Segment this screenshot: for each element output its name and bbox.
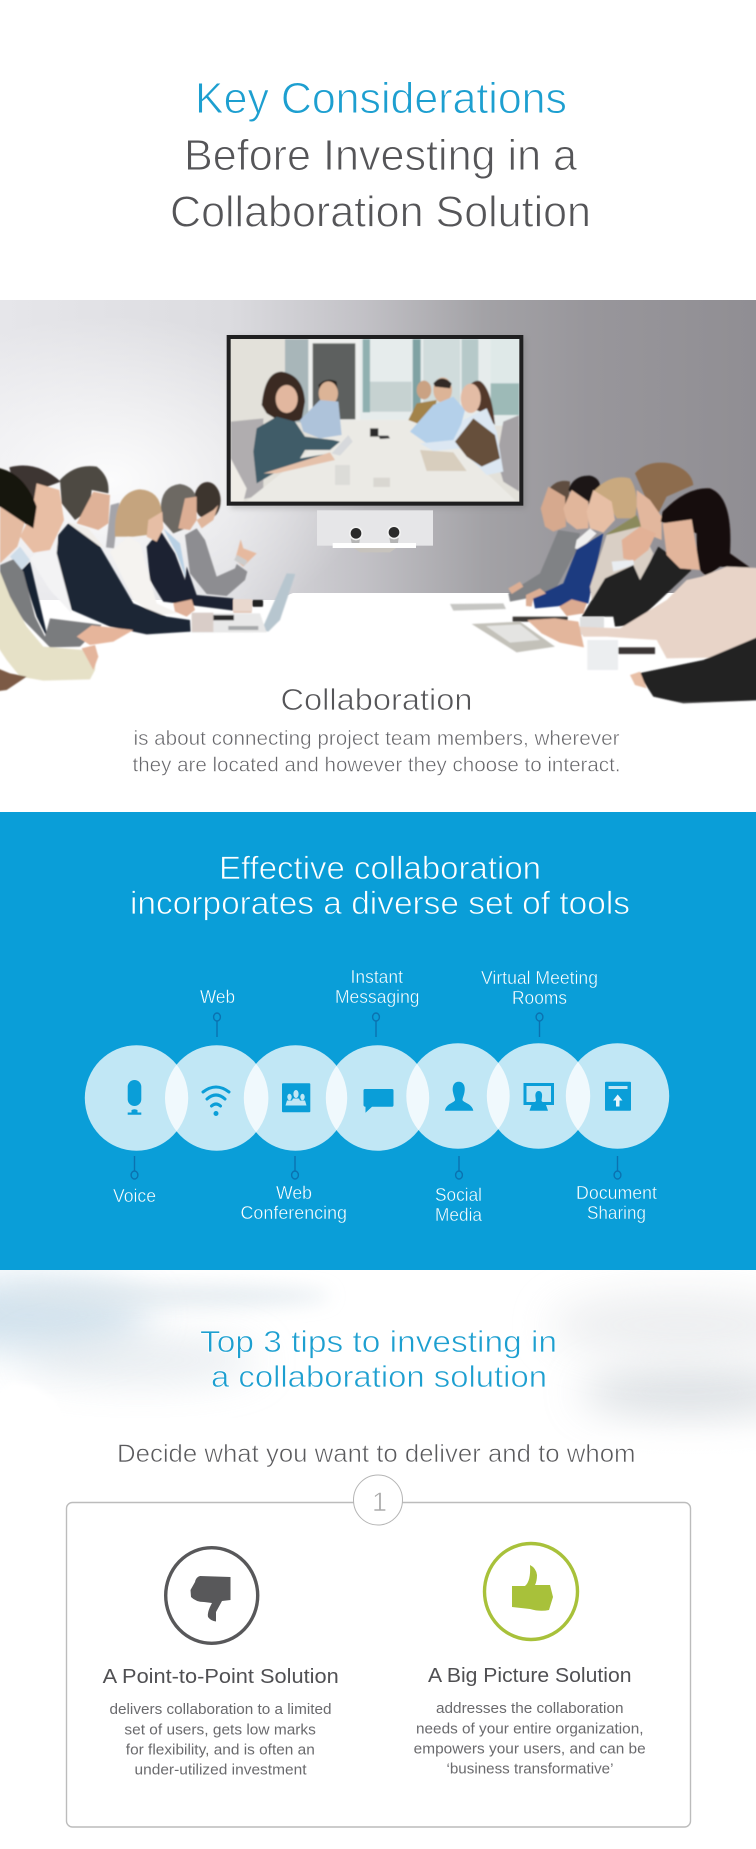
people on the left bbox=[0, 465, 295, 692]
tool labels: Web bbox=[276, 1183, 312, 1203]
tool labels bbox=[113, 967, 657, 1225]
tool labels: Social bbox=[435, 1185, 482, 1205]
glass bbox=[587, 640, 618, 670]
tool labels: Instant bbox=[350, 967, 403, 987]
overlapping circles bbox=[85, 1043, 669, 1151]
tool labels: Media bbox=[435, 1205, 483, 1225]
icon: thumbs up bbox=[484, 1544, 578, 1640]
panel: tip 1 bbox=[66, 1475, 690, 1827]
front woman bbox=[527, 488, 756, 658]
front woman bbox=[0, 467, 98, 692]
tablet and devices bbox=[450, 603, 655, 654]
icon: social media bbox=[445, 1082, 473, 1111]
blond woman bbox=[559, 477, 653, 616]
icon: web conferencing bbox=[282, 1083, 310, 1112]
tool labels: Messaging bbox=[335, 987, 420, 1007]
white chair bbox=[30, 535, 72, 613]
title: Collaboration Solution bbox=[170, 188, 591, 236]
icon: document sharing bbox=[605, 1082, 631, 1111]
text: point-to-point solution: delivers collaboration to a limited bbox=[110, 1702, 332, 1718]
text: big picture solution: ‘business transformative’ bbox=[446, 1761, 614, 1777]
tool labels: Conferencing bbox=[240, 1203, 347, 1223]
navy suit man bbox=[57, 466, 191, 634]
icon: thumbs down bbox=[166, 1548, 258, 1643]
navy sweater woman bbox=[526, 476, 603, 608]
tool labels: Web bbox=[200, 987, 235, 1007]
tool labels: Virtual Meeting bbox=[481, 968, 598, 988]
collaboration definition: is about connecting project team members, wherever bbox=[134, 728, 620, 750]
heading: top 3 tips bbox=[200, 1324, 557, 1394]
title bbox=[170, 74, 591, 236]
number badge: 1 bbox=[372, 1487, 387, 1517]
heading: effective collaboration bbox=[130, 850, 630, 921]
text: point-to-point solution: A Point-to-Point Solution bbox=[103, 1666, 339, 1688]
camera unit bbox=[317, 510, 433, 552]
text: point-to-point solution: set of users, gets low marks bbox=[124, 1722, 316, 1738]
photo bottom fade bbox=[676, 701, 729, 704]
people on the right bbox=[450, 463, 756, 703]
collaboration definition: they are located and however they choose to interact. bbox=[132, 754, 620, 776]
text: point-to-point solution: under-utilized investment bbox=[134, 1762, 306, 1778]
title: Key Considerations bbox=[195, 74, 567, 123]
wall bbox=[0, 300, 756, 600]
tool labels: Sharing bbox=[587, 1203, 646, 1223]
grey chair bbox=[106, 503, 119, 548]
woman left bbox=[253, 372, 340, 483]
laughing man bbox=[0, 465, 133, 647]
text: point-to-point solution: for flexibility, and is often an bbox=[126, 1742, 315, 1758]
tablet, laptop, items bbox=[332, 435, 353, 456]
laptop and glasses bbox=[192, 573, 295, 633]
gray suit man bbox=[185, 482, 257, 596]
icon: virtual meeting rooms bbox=[524, 1083, 554, 1111]
heading: effective collaboration: Effective collaboration bbox=[219, 850, 541, 886]
heading: top 3 tips: Top 3 tips to investing in bbox=[200, 1324, 557, 1359]
tool labels: Document bbox=[576, 1183, 657, 1203]
heading: top 3 tips: a collaboration solution bbox=[211, 1359, 547, 1394]
photo: video conference meeting room bbox=[0, 300, 756, 720]
icon: instant messaging bbox=[364, 1089, 394, 1113]
icon: web wifi bbox=[203, 1087, 229, 1114]
panel: tools bbox=[0, 812, 756, 1270]
tall man bbox=[582, 463, 693, 627]
clouds background bbox=[0, 1270, 756, 1430]
text: big picture solution: needs of your entire organization, bbox=[416, 1722, 644, 1738]
man with glasses bbox=[300, 380, 342, 438]
dark suit man bbox=[147, 484, 263, 613]
tool labels: Rooms bbox=[512, 988, 567, 1008]
subheading: decide: Decide what you want to deliver and to whom bbox=[117, 1440, 636, 1468]
gray suit man bbox=[508, 481, 580, 602]
table bbox=[286, 593, 675, 600]
blond woman bbox=[110, 489, 195, 617]
text: point-to-point solution bbox=[103, 1666, 339, 1778]
text: big picture solution: A Big Picture Solution bbox=[428, 1665, 632, 1687]
icon: voice bbox=[128, 1080, 141, 1115]
connectors bbox=[131, 1013, 621, 1179]
collaboration definition: Collaboration bbox=[280, 682, 472, 717]
video screen bbox=[227, 335, 526, 508]
title: Before Investing in a bbox=[184, 131, 578, 180]
three people on right bbox=[408, 377, 503, 475]
tool labels: Voice bbox=[113, 1186, 156, 1206]
front arm bbox=[638, 633, 756, 703]
text: big picture solution: addresses the collaboration bbox=[436, 1701, 624, 1717]
text: big picture solution: empowers your users, and can be bbox=[414, 1741, 646, 1757]
collaboration definition bbox=[132, 682, 620, 776]
number badge bbox=[354, 1475, 402, 1525]
heading: effective collaboration: incorporates a diverse set of tools bbox=[130, 885, 630, 921]
text: big picture solution bbox=[414, 1665, 646, 1777]
